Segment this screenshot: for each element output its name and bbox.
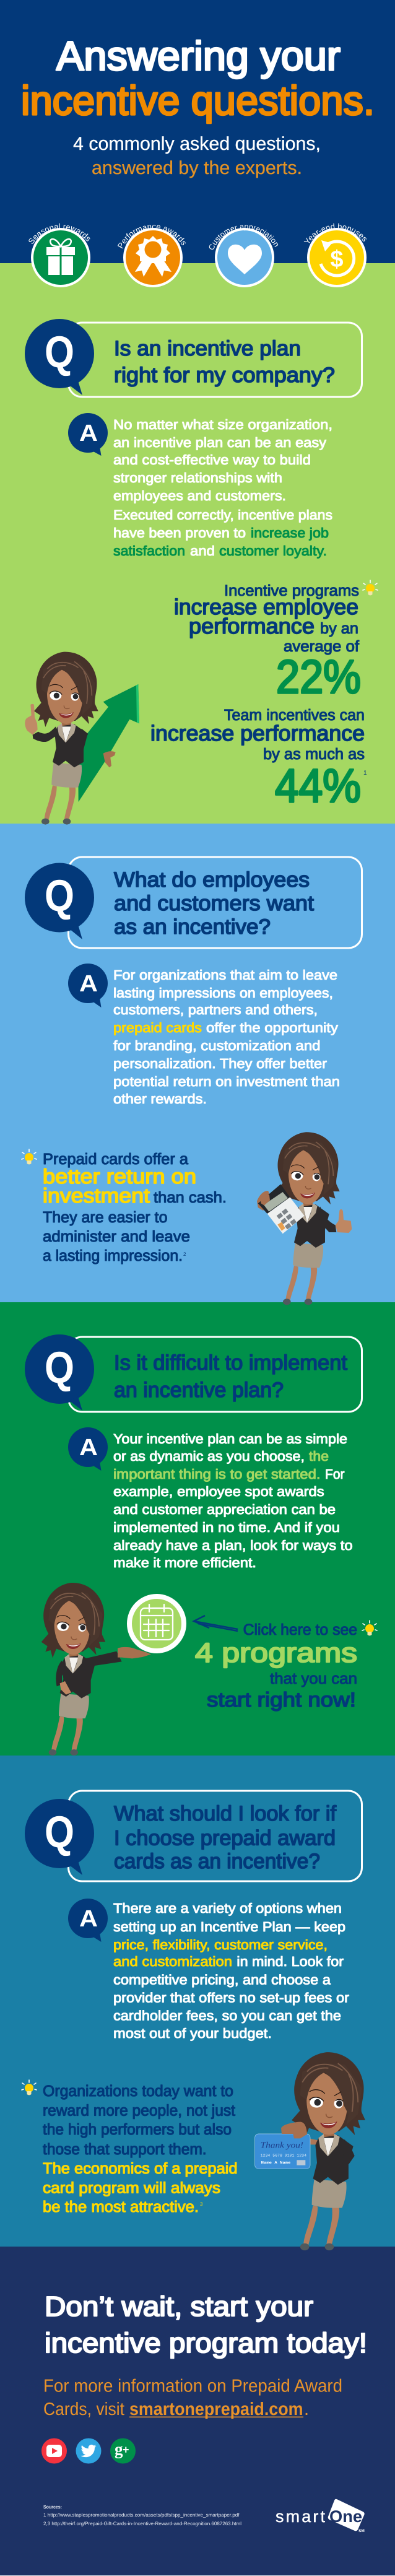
title: incentive questions. — [21, 77, 375, 123]
answer 2 text: for branding, customization and — [113, 1038, 321, 1053]
icon: A bubble 2 — [68, 964, 108, 1007]
answer 4 text: There are a variety of options when — [113, 1900, 342, 1916]
answer 4 text: provider that offers no set-up fees or — [113, 1990, 349, 2005]
answer 1 text: No matter what size organization, — [113, 417, 332, 432]
footer heading — [45, 2291, 367, 2359]
stat: 22 percent: 22% — [276, 651, 361, 703]
answer 1 text — [113, 417, 332, 559]
icon: Q bubble 1: Q — [45, 328, 74, 377]
prepaid card: Name A Name — [261, 2160, 290, 2165]
callout: 4 programs: start right now! — [207, 1688, 356, 1711]
icon: light bulb 2 — [22, 1149, 37, 1164]
icon: Q bubble 2: Q — [45, 871, 74, 921]
answer 4 text: in mind. Look for — [237, 1954, 344, 1969]
answer 4 text — [113, 1900, 349, 2041]
icon: seasonal rewards gift: Seasonal rewards — [28, 223, 90, 244]
answer 3 text: already have a plan, look for ways to — [113, 1538, 353, 1553]
prepaid card: Thank you! — [261, 2140, 303, 2150]
stat: 44 percent: by as much as — [263, 746, 365, 763]
character: woman with rising arrow — [25, 652, 139, 825]
question 1 heading — [114, 337, 335, 387]
character: woman holding thank-you card — [255, 2052, 365, 2250]
panel: question 2 background — [0, 824, 395, 1302]
answer 3 text: example, employee spot awards — [113, 1484, 324, 1499]
answer 4 text: price, flexibility, customer service, — [113, 1937, 328, 1952]
icon: A bubble 3 — [68, 1427, 108, 1471]
sources: Sources: — [43, 2504, 62, 2510]
callout: better return on investment: than cash. — [154, 1189, 227, 1206]
callout: better return on investment: a lasting impression. — [43, 1247, 183, 1264]
question 3 heading: Is it difficult to implement — [114, 1351, 348, 1375]
footer call to action: For more information on Prepaid Award — [43, 2377, 342, 2396]
icon: A bubble 1 — [68, 413, 108, 456]
question 3 box — [68, 1337, 362, 1412]
answer 1 text: and cost-effective way to build — [113, 452, 311, 468]
icon: year-end bonuses dollar: $ — [330, 246, 344, 272]
icon: performance awards ribbon — [118, 225, 186, 287]
stat: 22 percent: by an — [320, 620, 358, 637]
stat: 44 percent — [150, 707, 367, 812]
answer 4 text: setting up an Incentive Plan — keep — [113, 1919, 345, 1934]
sources: 1 http://www.staplespromotionalproducts.com/assets/pdfs/spp_incentive_smartpaper.pdf — [43, 2512, 240, 2518]
question 2 heading: as an incentive? — [114, 915, 271, 939]
callout: economics of prepaid: Organizations today want to — [43, 2082, 233, 2100]
prepaid card — [255, 2134, 310, 2169]
panel: question 3 background — [0, 1302, 395, 1756]
answer 2 text: personalization. They offer better — [113, 1056, 327, 1071]
callout: 4 programs: Click here to see — [243, 1621, 357, 1638]
callout: better return on investment: They are easier to — [43, 1209, 167, 1226]
footer bottom edge — [0, 2575, 395, 2576]
stat: 44 percent: 44% — [275, 760, 361, 812]
question 3 heading — [114, 1351, 348, 1402]
answer 2 text: For organizations that aim to leave — [113, 967, 337, 983]
character: woman presenting calendar — [41, 1583, 151, 1756]
answer 1 text: satisfaction — [113, 543, 185, 559]
stat: 22 percent: average of — [284, 638, 359, 655]
callout: economics of prepaid — [43, 2082, 238, 2216]
stat: 22 percent: Incentive programs — [224, 582, 359, 599]
footer call to action: Cards, visit — [43, 2400, 124, 2419]
icon: A bubble 4: A — [79, 1906, 98, 1932]
answer 3 text: the — [309, 1448, 329, 1464]
icon: light bulb 4 — [22, 2080, 37, 2095]
panel: footer background — [0, 2247, 395, 2576]
answer 2 text: other rewards. — [113, 1091, 207, 1107]
subtitle: 4 commonly asked questions, — [73, 134, 321, 154]
question 4 heading: What should I look for if — [114, 1802, 337, 1825]
icon: Q bubble 3: Q — [45, 1343, 74, 1393]
answer 2 text: potential return on investment than — [113, 1074, 340, 1089]
callout: economics of prepaid: the high performers but also — [43, 2121, 232, 2138]
question 4 heading — [114, 1802, 337, 1873]
answer 1 text: and — [190, 543, 215, 559]
question 2 heading: and customers want — [114, 892, 315, 915]
answer 1 text: have been proven to — [113, 525, 246, 541]
stat: 22 percent: increase employee — [174, 595, 358, 619]
callout: economics of prepaid: card program will always — [43, 2180, 220, 2197]
question 1 box — [68, 323, 362, 397]
answer 3 text: or as dynamic as you choose, — [113, 1448, 305, 1464]
answer 4 text: cardholder fees, so you can get the — [113, 2008, 341, 2024]
answer 3 text: implemented in no time. And if you — [113, 1520, 340, 1535]
logo: smartOne: One — [329, 2507, 362, 2526]
prepaid card: 1234 5678 9101 1234 — [261, 2154, 306, 2158]
icon: Q bubble 1 — [25, 319, 94, 395]
panel: question 4 background — [0, 1756, 395, 2247]
icon: performance awards ribbon: Performance awards — [118, 225, 186, 249]
answer 1 text: stronger relationships with — [113, 470, 282, 485]
panel: question 1 background — [0, 263, 395, 824]
footer heading: Don’t wait, start your — [45, 2291, 313, 2322]
answer 1 text: an incentive plan can be an easy — [113, 435, 326, 450]
icon: youtube — [41, 2439, 67, 2463]
question 1 heading: Is an incentive plan — [114, 337, 301, 360]
answer 3 text: make it more efficient. — [113, 1555, 256, 1570]
icon: light bulb 1 — [363, 580, 378, 596]
footer call to action: . — [304, 2400, 309, 2419]
callout: better return on investment — [43, 1151, 227, 1264]
question 4 heading: cards as an incentive? — [114, 1850, 320, 1873]
stat: 44 percent: 1 — [363, 770, 367, 777]
icon: google plus: + — [123, 2443, 129, 2456]
icon: light bulb 3 — [362, 1621, 377, 1636]
callout: 4 programs: 4 programs — [195, 1638, 357, 1668]
icon: A bubble 3: A — [79, 1435, 98, 1461]
icon: customer appreciation heart: Customer appreciation — [209, 225, 279, 250]
icon: twitter — [76, 2439, 102, 2463]
stat: 22 percent: performance — [189, 614, 315, 638]
footer call to action: smartoneprepaid.com — [129, 2400, 303, 2419]
callout: better return on investment: administer and leave — [43, 1228, 190, 1245]
icon: year-end bonuses dollar: Year-end bonuses — [303, 223, 367, 243]
answer 4 text: competitive pricing, and choose a — [113, 1972, 331, 1988]
sources: 2,3 http://theirf.org/Prepaid-Gift-Cards-in-Incentive-Reward-and-Recognition.6087263.html — [43, 2521, 241, 2526]
title — [21, 33, 375, 123]
answer 2 text — [113, 967, 340, 1107]
callout: better return on investment: better return on — [43, 1165, 196, 1188]
icon: A bubble 1: A — [79, 420, 98, 446]
answer 1 text: Executed correctly, incentive plans — [113, 507, 332, 523]
answer 1 text: employees and customers. — [113, 488, 286, 503]
answer 3 text: and customer appreciation can be — [113, 1502, 336, 1517]
panel: header background — [0, 0, 395, 263]
question 4 heading: I choose prepaid award — [114, 1827, 336, 1850]
callout: 4 programs: that you can — [270, 1670, 357, 1687]
icon: Q bubble 2 — [25, 863, 94, 939]
answer 1 text: customer loyalty. — [219, 543, 327, 559]
answer 2 text: lasting impressions on employees, — [113, 985, 333, 1001]
callout: economics of prepaid: those that support them. — [43, 2141, 207, 2158]
callout: better return on investment: 2 — [183, 1251, 186, 1257]
icon: A bubble 4 — [68, 1899, 108, 1942]
logo: smartOne: SM — [358, 2529, 365, 2533]
callout: economics of prepaid: The economics of a prepaid — [43, 2160, 238, 2177]
sources — [43, 2504, 241, 2526]
answer 2 text: offer the opportunity — [206, 1020, 338, 1035]
icon: google plus: g — [115, 2440, 123, 2458]
answer 3 text: Your incentive plan can be as simple — [113, 1431, 347, 1447]
answer 4 text: most out of your budget. — [113, 2026, 272, 2041]
stat: 44 percent: Team incentives can — [224, 707, 365, 724]
callout: economics of prepaid: reward more people, not just — [43, 2102, 235, 2119]
arrow: to calendar — [194, 1616, 238, 1631]
icon: Q bubble 4: Q — [45, 1808, 74, 1857]
callout: better return on investment: Prepaid cards offer a — [43, 1151, 188, 1168]
icon: Q bubble 3 — [25, 1334, 94, 1411]
stat: 44 percent: increase performance — [150, 721, 365, 746]
answer 1 text: increase job — [251, 525, 329, 541]
footer heading: incentive program today! — [45, 2327, 367, 2359]
question 3 heading: an incentive plan? — [114, 1378, 284, 1402]
callout: better return on investment: investment — [43, 1184, 150, 1207]
answer 3 text — [113, 1431, 353, 1570]
answer 4 text: and customization — [113, 1954, 232, 1969]
icon: Q bubble 4 — [25, 1799, 94, 1875]
question 2 heading — [114, 868, 315, 939]
icon: google plus — [110, 2439, 136, 2463]
answer 2 text: prepaid cards — [113, 1020, 202, 1035]
question 1 heading: right for my company? — [114, 363, 335, 387]
icon: year-end bonuses dollar — [303, 223, 367, 287]
icon: calendar button — [129, 1596, 184, 1651]
question 2 box — [68, 857, 362, 948]
subtitle: answered by the experts. — [92, 158, 302, 178]
answer 3 text: important thing is to get started. — [113, 1466, 321, 1482]
character: woman with calculator — [257, 1132, 352, 1305]
question 4 box — [68, 1791, 362, 1881]
logo: smartOne: smart — [276, 2507, 325, 2526]
question 2 heading: What do employees — [114, 868, 310, 892]
answer 2 text: customers, partners and others, — [113, 1002, 318, 1017]
callout: economics of prepaid: 3 — [200, 2201, 203, 2207]
callout: 4 programs — [195, 1621, 357, 1711]
logo: smartOne — [276, 2499, 365, 2533]
icon: seasonal rewards gift — [28, 223, 90, 287]
footer call to action — [43, 2377, 342, 2419]
callout: economics of prepaid: be the most attractive. — [43, 2198, 199, 2216]
answer 3 text: For — [325, 1466, 344, 1482]
icon: A bubble 2: A — [79, 971, 98, 997]
title: Answering your — [56, 33, 341, 79]
subtitle — [73, 134, 321, 178]
icon: customer appreciation heart — [209, 225, 279, 287]
stat: 22 percent — [174, 582, 361, 703]
